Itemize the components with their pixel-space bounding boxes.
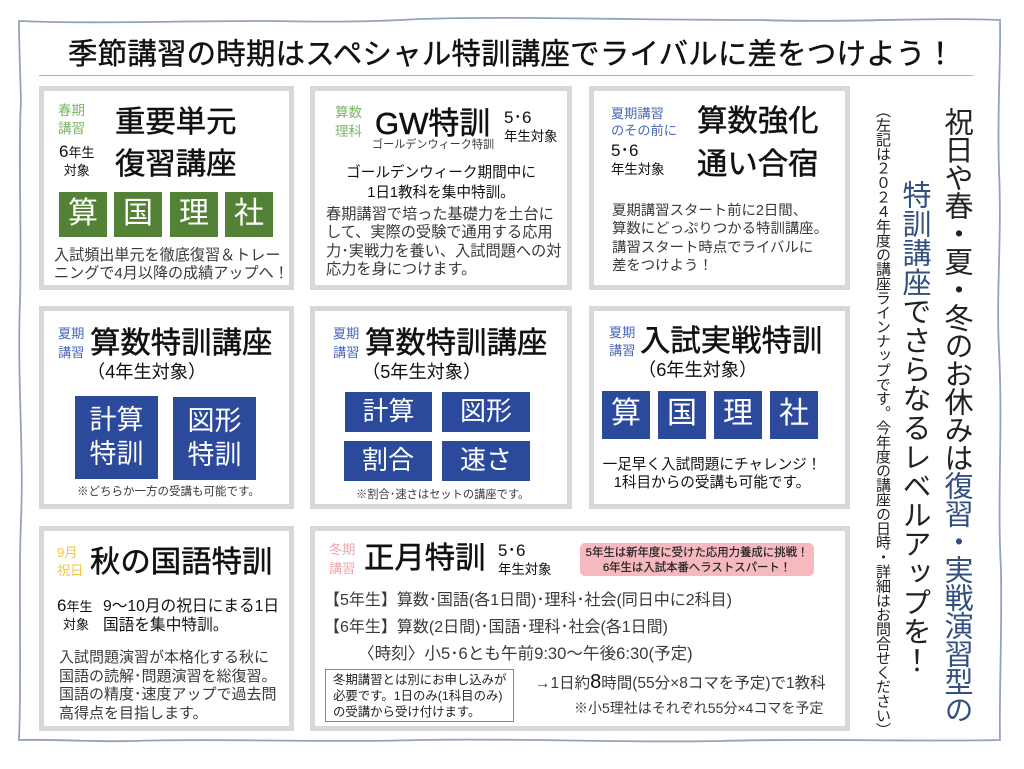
grade 5 schedule: 【5年生】算数･国語(各1日間)･理科･社会(同日中に2科目) bbox=[324, 592, 732, 609]
season tag: 算数 bbox=[335, 105, 362, 120]
box: Japanese: 国 bbox=[667, 397, 697, 430]
note box: 冬期講習とは別にお申し込みが bbox=[333, 673, 506, 687]
box: ratio: 割合 bbox=[362, 445, 414, 475]
box: geometry: 特訓 bbox=[188, 440, 242, 470]
season tag: 夏期 bbox=[333, 326, 359, 341]
panel: grade 5 math bbox=[310, 306, 572, 509]
season tag: 春期 bbox=[58, 103, 85, 118]
heading bbox=[697, 104, 819, 181]
note box bbox=[325, 669, 514, 722]
season tag: 講習 bbox=[329, 561, 355, 576]
box: science: 理 bbox=[179, 197, 209, 230]
target grade: 対象 bbox=[64, 162, 90, 178]
side message: 祝日や春・夏・冬のお休みは 復習・実戦演習型の bbox=[940, 107, 972, 723]
box: social studies: 社 bbox=[234, 197, 264, 230]
season tag: 理科 bbox=[335, 124, 362, 139]
box: speed bbox=[442, 441, 530, 481]
target grade: 年生対象 bbox=[504, 129, 558, 144]
target grade bbox=[504, 108, 558, 144]
target grade bbox=[59, 142, 94, 178]
box: social studies: 社 bbox=[779, 397, 809, 430]
target grade: 対象 bbox=[63, 617, 89, 632]
lead text: 1日1教科を集中特訓。 bbox=[367, 185, 515, 201]
science and social note: ※小5理社はそれぞれ55分×4コマを予定 bbox=[574, 700, 823, 716]
description: 国語の精度･速度アップで過去問 bbox=[59, 686, 277, 703]
note: ※割合･速さはセットの講座です。 bbox=[356, 489, 529, 501]
season tag: 講習 bbox=[58, 121, 85, 136]
target grade: 6年生 bbox=[57, 596, 92, 615]
side message continued: 特訓講座 でさらなるレベルアップを！ bbox=[898, 180, 930, 675]
heading: 秋の国語特訓 bbox=[90, 545, 272, 579]
description: 応力を身につけます。 bbox=[326, 261, 476, 278]
season tag: 祝日 bbox=[57, 563, 83, 578]
box: calculation: 特訓 bbox=[90, 439, 144, 469]
season tag bbox=[58, 103, 85, 136]
box: calculation: 計算 bbox=[362, 396, 414, 426]
box: social studies bbox=[225, 192, 273, 237]
heading bbox=[115, 105, 237, 181]
box: Japanese bbox=[114, 192, 162, 237]
callout: 6年生は入試本番へラストスパート！ bbox=[603, 562, 791, 574]
season tag bbox=[333, 326, 359, 360]
box: social studies bbox=[770, 391, 818, 439]
box: calculation: 計算 bbox=[90, 405, 144, 435]
lead text: ゴールデンウィーク期間中に bbox=[346, 165, 536, 181]
heading: 正月特訓 bbox=[364, 541, 486, 575]
panel: autumn Japanese bbox=[39, 526, 294, 731]
description: 力･実戦力を養い、入試問題への対 bbox=[326, 243, 561, 260]
lead text: 9～10月の祝日にまる1日 bbox=[103, 598, 279, 615]
box: ratio bbox=[344, 441, 432, 481]
description: 入試頻出単元を徹底復習＆トレー bbox=[54, 247, 280, 264]
box: geometry bbox=[173, 397, 256, 480]
description: 差をつけよう！ bbox=[612, 258, 713, 274]
heading: GW特訓 bbox=[375, 106, 490, 141]
description: ニングで4月以降の成績アップへ！ bbox=[54, 265, 289, 282]
note box: 必要です。1日のみ(1科目のみ) bbox=[333, 689, 502, 703]
title underline bbox=[39, 75, 973, 76]
box: math bbox=[602, 391, 650, 439]
panel: grade 4 math bbox=[39, 306, 294, 509]
box: science bbox=[714, 391, 762, 439]
description: 入試問題演習が本格化する秋に bbox=[59, 649, 269, 666]
season tag: 9月 bbox=[57, 545, 78, 560]
season tag: 夏期 bbox=[58, 326, 84, 341]
box: math: 算 bbox=[68, 197, 98, 230]
panel: spring review course bbox=[39, 86, 294, 290]
target grade: （4年生対象） bbox=[87, 362, 206, 382]
season tag bbox=[329, 542, 355, 576]
target grade: （5年生対象） bbox=[362, 362, 481, 382]
season tag: 講習 bbox=[609, 343, 635, 358]
season tag: 講習 bbox=[58, 345, 84, 360]
callout bbox=[580, 543, 814, 576]
box: math bbox=[59, 192, 107, 237]
heading: 算数特訓講座 bbox=[90, 326, 272, 360]
heading: 算数強化 bbox=[697, 104, 819, 138]
target grade bbox=[498, 541, 552, 577]
target grade: 5･6 bbox=[498, 541, 525, 560]
box: math: 算 bbox=[611, 397, 641, 430]
heading subtitle: ゴールデンウィーク特訓 bbox=[372, 139, 494, 151]
side note: （左記は２０２４年度の講座ラインナップです。今年度の講座の日時・詳細はお問合せください） bbox=[874, 103, 891, 737]
season tag: 夏期 bbox=[609, 325, 635, 340]
season tag bbox=[611, 106, 677, 138]
target grade bbox=[57, 596, 92, 632]
target grade: 5･6 bbox=[504, 108, 531, 127]
callout: 5年生は新年度に受けた応用力養成に挑戦！ bbox=[586, 547, 808, 559]
description: 高得点を目指します。 bbox=[59, 705, 208, 722]
panel: math intensive camp bbox=[589, 86, 850, 290]
subject boxes bbox=[59, 192, 273, 237]
box: geometry: 図形 bbox=[188, 406, 242, 436]
description: 1科目からの受講も可能です。 bbox=[614, 475, 810, 491]
target grade: 年生対象 bbox=[611, 162, 665, 177]
target grade: （6年生対象） bbox=[638, 360, 757, 380]
description: 国語の読解･問題演習を総復習。 bbox=[59, 668, 277, 685]
box: science bbox=[170, 192, 218, 237]
description bbox=[59, 649, 277, 722]
lead text: 国語を集中特訓。 bbox=[103, 617, 228, 634]
panel: GW course bbox=[310, 86, 572, 290]
season tag bbox=[335, 105, 362, 139]
hours: →1日約8時間(55分×8コマを予定)で1教科 bbox=[535, 671, 826, 693]
description: して、実際の受験で通用する応用 bbox=[326, 224, 553, 241]
title: 季節講習の時期はスペシャル特訓講座でライバルに差をつけよう！ bbox=[68, 38, 955, 71]
box: science: 理 bbox=[723, 397, 753, 430]
season tag: 夏期講習 bbox=[611, 106, 664, 121]
box: speed: 速さ bbox=[460, 445, 512, 475]
box: Japanese: 国 bbox=[123, 197, 153, 230]
heading: 重要単元 bbox=[115, 105, 237, 139]
season tag bbox=[58, 326, 84, 360]
description: 夏期講習スタート前に2日間、 bbox=[612, 203, 807, 219]
target grade: 6年生 bbox=[59, 142, 94, 161]
box: calculation bbox=[75, 396, 158, 479]
season tag: 冬期 bbox=[329, 542, 355, 557]
box: calculation bbox=[345, 392, 432, 432]
target grade: 年生対象 bbox=[498, 562, 552, 577]
description bbox=[603, 456, 821, 491]
heading: 算数特訓講座 bbox=[365, 326, 547, 360]
description: 算数にどっぷりつかる特訓講座。 bbox=[612, 221, 828, 237]
description bbox=[54, 246, 289, 282]
season tag bbox=[57, 545, 83, 578]
description: 一足早く入試問題にチャレンジ！ bbox=[603, 457, 821, 473]
description: 春期講習で培った基礎力を土台に bbox=[326, 206, 554, 223]
box: geometry: 図形 bbox=[460, 396, 512, 426]
target grade: 5･6 bbox=[611, 141, 638, 160]
season tag: 講習 bbox=[333, 345, 359, 360]
box: geometry bbox=[442, 392, 530, 432]
heading: 入試実戦特訓 bbox=[640, 324, 822, 358]
season tag: のその前に bbox=[611, 123, 677, 138]
box: Japanese bbox=[658, 391, 706, 439]
lead text bbox=[346, 164, 536, 201]
target grade bbox=[611, 141, 665, 177]
note: ※どちらか一方の受講も可能です。 bbox=[77, 486, 260, 498]
description bbox=[326, 206, 561, 278]
note box: の受講から受け付けます。 bbox=[333, 705, 480, 719]
season tag bbox=[609, 325, 635, 358]
description: 講習スタート時点でライバルに bbox=[612, 240, 813, 256]
grade 6 schedule: 【6年生】算数(2日間)･国語･理科･社会(各1日間) bbox=[324, 619, 668, 636]
description bbox=[612, 202, 828, 274]
heading: 復習講座 bbox=[115, 147, 237, 181]
panel: New Year course bbox=[310, 526, 850, 731]
heading: 通い合宿 bbox=[697, 147, 819, 181]
time: 〈時刻〉小5･6とも午前9:30～午後6:30(予定) bbox=[358, 644, 693, 663]
panel: grade 6 exam practice bbox=[589, 306, 850, 509]
lead text bbox=[103, 597, 279, 634]
